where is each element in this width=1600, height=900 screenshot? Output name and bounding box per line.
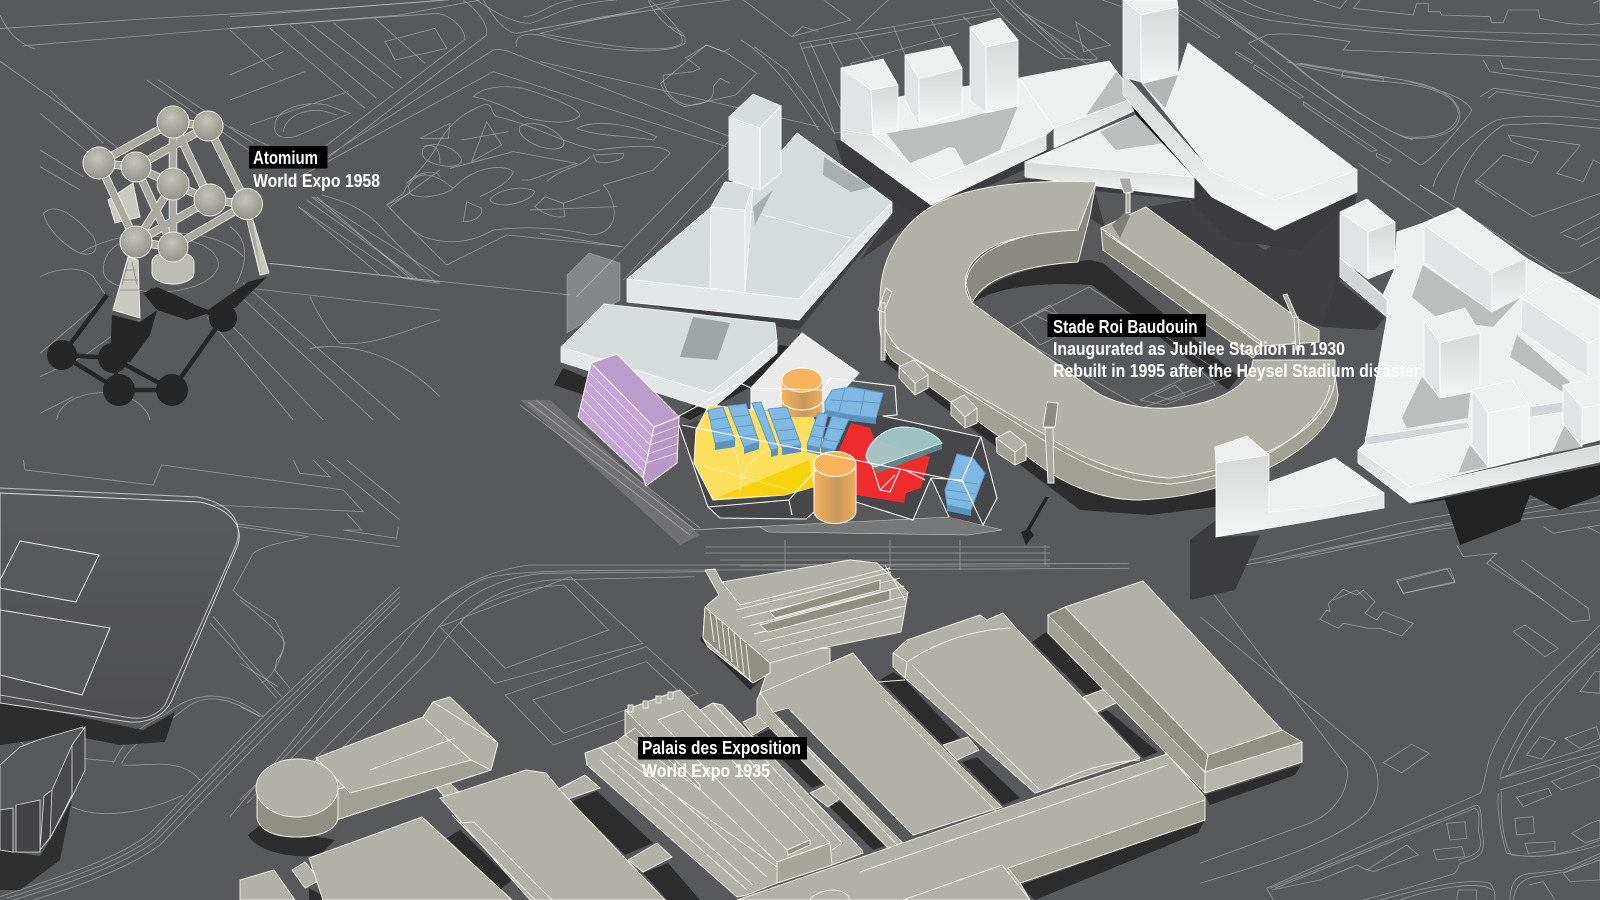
- north block with ribbed roof: [703, 560, 908, 683]
- building: lower block: [561, 304, 777, 410]
- white site wireframe: [679, 378, 997, 525]
- dark ground between central buildings: [830, 160, 1357, 327]
- plaza raised plate: [0, 541, 99, 602]
- floodlight masts: [878, 178, 1300, 545]
- stadium east stand: [1101, 207, 1319, 358]
- label: Stade Roi Baudouin: Stade Roi Baudouin: [1053, 317, 1198, 337]
- black gap between blocks: [1126, 94, 1214, 197]
- annex boxes: [899, 360, 1026, 465]
- black shadow west: [554, 345, 810, 420]
- rear tower: [729, 94, 781, 190]
- roads south-east: [1200, 560, 1600, 900]
- yellow volume: [694, 405, 826, 500]
- left platform plaza: [0, 488, 239, 745]
- hall 6: [309, 817, 512, 900]
- atomium rods: [99, 122, 247, 247]
- Design Museum programme model: [578, 354, 997, 525]
- label: Atomium: [249, 146, 380, 191]
- east bridges: [1340, 258, 1563, 445]
- stadium inner wall: [966, 182, 1096, 303]
- hall 4 with stepped roof: [585, 690, 863, 897]
- site wireframe lower ramp and tracks: [520, 400, 1050, 570]
- roads north-east: [1178, 0, 1600, 200]
- stadium horseshoe roof: [880, 181, 1335, 478]
- east box T4: [1521, 278, 1600, 377]
- label: Stade Roi Baudouin: Inaugurated as Jubilee Stadion in 1930: [1053, 339, 1345, 359]
- hall gaps and shadows: [248, 625, 1302, 900]
- building: slab with three towers: [841, 18, 1054, 205]
- roads south-west: [0, 460, 400, 900]
- hall 3: [757, 653, 1010, 850]
- stadium outer wall: [879, 300, 1338, 500]
- lower-left building: [0, 727, 85, 890]
- cross hall south: [737, 754, 1205, 900]
- darker ground inside site: [679, 410, 997, 525]
- tower on block: [710, 182, 753, 293]
- white buildings east: [1190, 199, 1600, 600]
- blue block sides: [715, 410, 971, 516]
- label: Atomium: Atomium: [253, 148, 318, 168]
- parkland and roads north-west: [230, 0, 730, 297]
- atomium shadow: [47, 277, 267, 406]
- hall 5: [440, 770, 665, 900]
- curved railway and fields: [240, 563, 1128, 820]
- east complex shadows: [1190, 280, 1385, 600]
- white buildings north: [835, 0, 1357, 250]
- plaza lower plate: [0, 610, 110, 695]
- hall 4 vents: [628, 692, 673, 712]
- label: Palais des Exposition: Palais des Exposition: [642, 738, 801, 758]
- teal half dome: [866, 427, 942, 492]
- tower 3: [970, 18, 1018, 113]
- hall 7: [240, 870, 295, 900]
- label: Atomium: World Expo 1958: [253, 171, 380, 191]
- ghost tower: [567, 253, 620, 333]
- orange cylinder large: [814, 452, 856, 523]
- blue blocks: [708, 387, 883, 450]
- east box T5: [1563, 377, 1600, 447]
- east box T1: [1424, 208, 1526, 312]
- roads around atomium: [40, 80, 440, 420]
- pale blue buildings west: [554, 94, 892, 420]
- hall 1 east: [1048, 581, 1302, 793]
- east box T2: [1424, 308, 1480, 398]
- red volume: [839, 423, 930, 503]
- east shadows on roof: [1402, 265, 1582, 473]
- hall 4 raised ridge: [658, 710, 810, 850]
- roads east: [1217, 180, 1600, 600]
- white triangular block behind: [751, 333, 859, 413]
- rotunda building: [256, 697, 498, 837]
- orange cylinder small: [780, 368, 822, 417]
- label: Stade Roi Baudouin: [1048, 314, 1420, 381]
- roads top centre: [540, 0, 1121, 247]
- building: triangular block: [1025, 115, 1194, 198]
- building: large block: [627, 94, 892, 330]
- stadium shadow: [880, 320, 1230, 515]
- L-shaped building: [1215, 436, 1384, 537]
- atomium back legs and base: [108, 183, 269, 318]
- connectors: [292, 648, 1205, 888]
- tower 1: [841, 59, 898, 135]
- building: quad block: [1019, 61, 1136, 148]
- label: Palais des Exposition: World Expo 1935: [642, 761, 770, 781]
- label: Stade Roi Baudouin: Rebuilt in 1995 after the Heysel Stadium disaster: [1053, 361, 1420, 381]
- Atomium monument: [47, 106, 269, 406]
- east base wall: [1358, 445, 1600, 503]
- atomium spheres: [83, 106, 262, 262]
- east complex base: [1340, 208, 1600, 487]
- hall 2: [893, 613, 1140, 793]
- tower 2: [905, 46, 962, 126]
- purple tower: [578, 354, 679, 486]
- blue block east: [945, 454, 985, 510]
- pitch lines: [1005, 287, 1228, 408]
- east box T3: [1472, 380, 1529, 467]
- label: Palais des Exposition: [638, 737, 807, 781]
- stadium: [878, 178, 1338, 545]
- building: long slab with tall tower: [1123, 0, 1357, 230]
- exhibition halls: [240, 560, 1302, 900]
- east tower K: [1340, 199, 1395, 279]
- shadows of north buildings: [835, 130, 1357, 250]
